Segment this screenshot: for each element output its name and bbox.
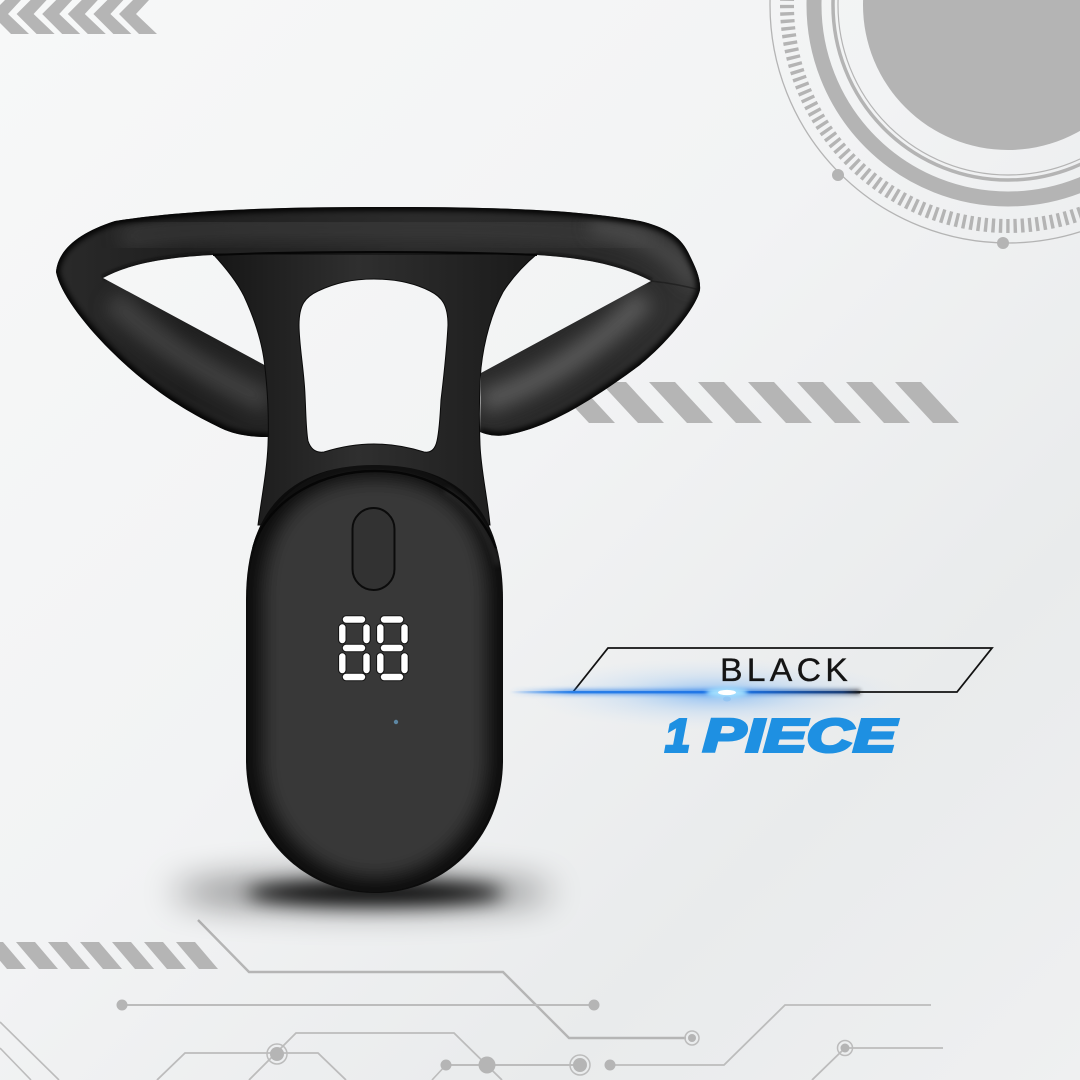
- right arm highlight: [482, 298, 645, 402]
- concentric tech circle top right: [770, 0, 1080, 249]
- drop shadow under device: [172, 876, 552, 908]
- label frame: [573, 648, 992, 692]
- right tip crease: [651, 281, 700, 290]
- right band highlight: [590, 226, 695, 285]
- strap seam under band: [213, 252, 537, 255]
- bright line and flare: [510, 688, 860, 702]
- decorative stripes bottom left: [0, 942, 218, 969]
- circuit lines bottom: [0, 920, 943, 1080]
- power button: [352, 508, 394, 590]
- blue indicator dot: [394, 720, 398, 724]
- decorative stripes middle right: [551, 382, 959, 423]
- colour name: BLACK: [720, 652, 852, 688]
- blue glow: [525, 658, 905, 730]
- colour label callout: [510, 648, 992, 762]
- left arm highlight: [112, 300, 268, 402]
- quantity: PIECE: [703, 710, 898, 762]
- collar dark outer edge: [56, 207, 700, 437]
- decorative chevrons top left: [0, 0, 157, 34]
- quantity: [665, 710, 898, 762]
- LED display 88: [342, 620, 404, 677]
- product: posture device: [50, 200, 710, 908]
- band highlight: [120, 228, 650, 242]
- neck strap with window: [213, 254, 537, 525]
- collar band and arms: [50, 200, 710, 445]
- band under-edge shading: [103, 255, 651, 281]
- main pod body: [246, 465, 503, 893]
- quantity: 1: [665, 710, 690, 762]
